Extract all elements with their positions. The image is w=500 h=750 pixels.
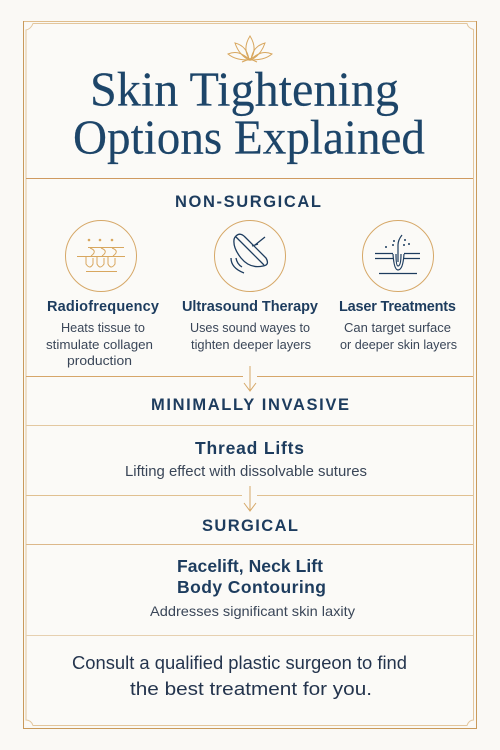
label: radiofrequency: Radiofrequency — [47, 299, 159, 315]
heading: minimally invasive: MINIMALLY INVASIVE — [151, 396, 349, 414]
label: facelift, neck lift, body contouring: Body Contouring — [177, 577, 326, 597]
label: thread lifts: Thread Lifts — [195, 438, 304, 458]
panel: radiofrequency — [46, 220, 159, 368]
heading: non-surgical: NON-SURGICAL — [175, 193, 321, 211]
callout: consult a surgeon — [72, 653, 407, 699]
icon: skin tissue with heat — [66, 220, 136, 292]
description: radiofrequency: stimulate collagen — [46, 337, 153, 352]
divider lines — [26, 178, 473, 636]
icon: ultrasound dish — [214, 220, 286, 292]
title: Skin Tightening — [90, 64, 399, 116]
arrow: minimally invasive to surgical — [244, 486, 256, 511]
description: radiofrequency: production — [67, 353, 132, 368]
description: surgical options: Addresses significant skin laxity — [150, 603, 355, 619]
panel: surgical options — [150, 556, 355, 619]
description: radiofrequency — [46, 320, 153, 368]
description: ultrasound therapy: Uses sound wayes to — [190, 320, 310, 335]
label: facelift, neck lift, body contouring — [177, 556, 326, 597]
arrow: non-surgical to minimally invasive — [244, 366, 256, 391]
description: thread lifts: Lifting effect with dissolvable sutures — [125, 464, 367, 480]
panel: ultrasound therapy — [182, 220, 318, 352]
label: facelift, neck lift, body contouring: Facelift, Neck Lift — [177, 556, 323, 576]
description: radiofrequency: Heats tissue to — [61, 320, 145, 335]
description: ultrasound therapy: tighten deeper layers — [191, 337, 311, 352]
description: laser treatments: or deeper skin layers — [340, 337, 457, 352]
description: ultrasound therapy — [190, 320, 311, 352]
description: laser treatments — [340, 320, 457, 352]
panel: thread lifts — [125, 438, 367, 480]
icon: hair follicle with laser — [362, 220, 434, 292]
label: laser treatments: Laser Treatments — [339, 299, 456, 315]
description: laser treatments: Can target surface — [344, 320, 451, 335]
label: ultrasound therapy: Ultrasound Therapy — [182, 299, 318, 315]
callout: consult a surgeon: the best treatment for you. — [130, 679, 372, 699]
panel: laser treatments — [339, 220, 457, 352]
heading: surgical: SURGICAL — [202, 517, 298, 535]
title: Options Explained — [73, 112, 425, 164]
callout: consult a surgeon: Consult a qualified plastic surgeon to find — [72, 653, 407, 673]
icon: lotus ornament — [228, 36, 272, 62]
title — [73, 64, 425, 164]
